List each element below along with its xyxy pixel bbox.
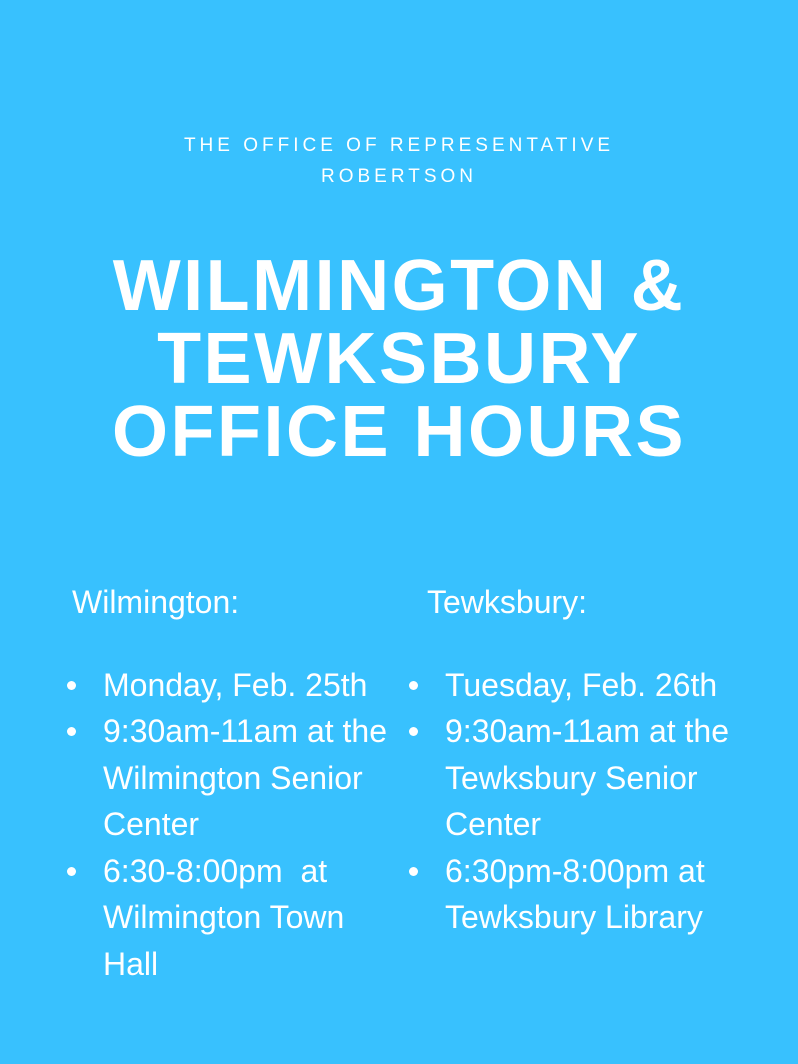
panel: wilmington bbox=[67, 584, 387, 982]
title bbox=[112, 246, 686, 472]
title: TEWKSBURY bbox=[157, 319, 641, 399]
list: wilmington hours bbox=[67, 666, 387, 982]
list: wilmington hours: Monday, Feb. 25th bbox=[103, 666, 367, 702]
subtitle: ROBERTSON bbox=[321, 166, 477, 187]
heading: wilmington: Wilmington: bbox=[72, 584, 239, 620]
list: wilmington hours: 6:30-8:00pm at Wilmington Town Hall bbox=[103, 852, 344, 982]
subtitle: THE OFFICE OF REPRESENTATIVE bbox=[184, 135, 614, 156]
title: OFFICE HOURS bbox=[112, 392, 686, 472]
list: tewksbury hours bbox=[409, 666, 729, 935]
list: tewksbury hours: 6:30pm-8:00pm at Tewksbury Library bbox=[445, 852, 705, 935]
list: tewksbury hours: 9:30am-11am at the Tewksbury Senior Center bbox=[445, 713, 729, 842]
title: WILMINGTON & bbox=[113, 246, 685, 326]
panel: tewksbury bbox=[409, 584, 729, 935]
list: tewksbury hours: Tuesday, Feb. 26th bbox=[445, 666, 717, 702]
heading: tewksbury: Tewksbury: bbox=[427, 584, 587, 620]
subtitle bbox=[184, 135, 614, 187]
list: wilmington hours: 9:30am-11am at the Wilmington Senior Center bbox=[103, 713, 387, 842]
